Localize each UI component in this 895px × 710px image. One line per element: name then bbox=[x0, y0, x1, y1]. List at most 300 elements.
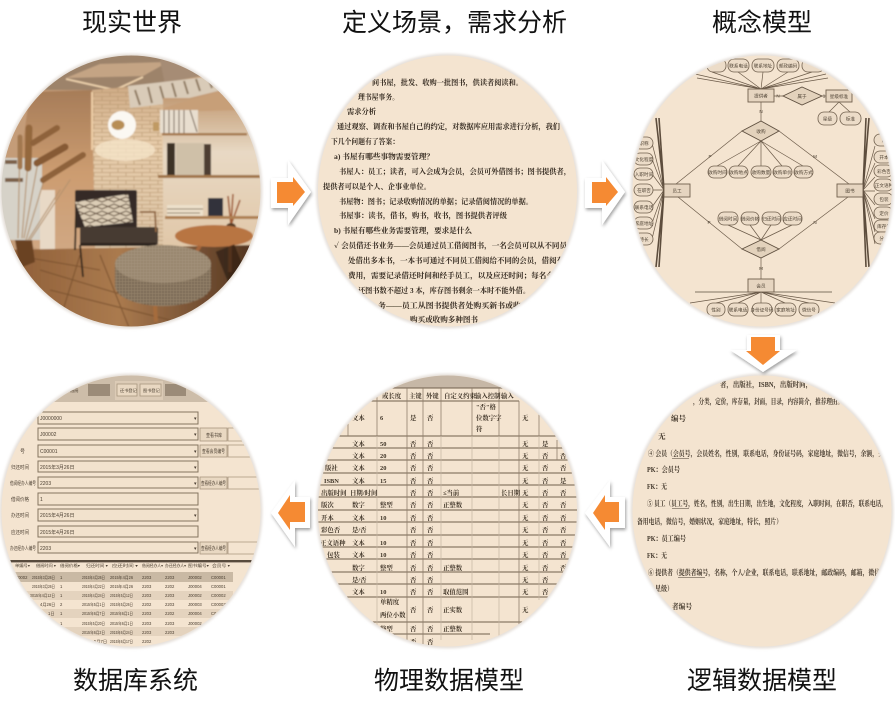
ER attribute ovals: 收购方式 bbox=[794, 169, 813, 176]
ER attribute ovals: 联系地址 bbox=[754, 62, 773, 70]
table rows: 否 bbox=[427, 605, 434, 614]
data grid: 2015年5月26日 bbox=[110, 601, 133, 608]
table rows: 无 bbox=[522, 550, 529, 559]
toolbar: 还书登记 bbox=[120, 387, 138, 394]
table header: 自定义约束 bbox=[444, 391, 477, 400]
ER attribute ovals: 性别 bbox=[711, 306, 721, 314]
panel: logical data model text circle: 备用电话，微信号，婚姻状况，家庭地址，特长，照片） bbox=[637, 516, 782, 527]
panel: requirement analysis text circle: 下几个问题有了答案： bbox=[331, 137, 399, 146]
title: 数据库系统: 数据库系统 bbox=[73, 667, 198, 695]
table rows: 是 bbox=[542, 439, 549, 448]
table rows: 正文语种 bbox=[320, 538, 346, 547]
table rows: 无 bbox=[522, 451, 529, 460]
ER attribute ovals: 联系电话 bbox=[635, 204, 654, 211]
ER attribute ovals: 在职否 bbox=[637, 187, 651, 194]
table rows: 否 bbox=[410, 538, 417, 547]
table rows: 数字 bbox=[352, 500, 365, 509]
form fields: 2203 bbox=[40, 546, 51, 552]
data grid: J00002 bbox=[188, 621, 202, 626]
table rows: 否 bbox=[427, 488, 434, 497]
ER attribute ovals: 微信号 bbox=[802, 306, 816, 314]
data grid: 2015年6月2日 bbox=[82, 629, 105, 636]
table rows: 无 bbox=[522, 500, 529, 509]
data grid: 图书编号▾ bbox=[188, 562, 209, 569]
panel: logical data model text circle: FK：无 bbox=[647, 481, 667, 491]
ER relationship lines bbox=[652, 72, 875, 303]
table rows: 否 bbox=[410, 463, 417, 472]
table rows: 两位小数 bbox=[380, 610, 406, 619]
data grid: C0 bbox=[211, 611, 217, 616]
table rows: 否 bbox=[560, 463, 567, 472]
ER attribute ovals: 借阅时间 bbox=[719, 216, 738, 222]
table rows bbox=[320, 402, 567, 646]
ER entities bbox=[664, 89, 863, 292]
form fields: 2203 bbox=[40, 481, 51, 487]
ER cardinality labels: 1 bbox=[823, 94, 826, 98]
table rows: 否 bbox=[542, 587, 549, 596]
table rows: 版次 bbox=[321, 500, 334, 509]
form labels: 办还经办人编号 bbox=[10, 545, 36, 552]
data grid: 4月26日 bbox=[40, 602, 55, 608]
form fields: J0000000 bbox=[40, 416, 62, 422]
toolbar: 图书登记 bbox=[143, 387, 161, 394]
table rows: 整型 bbox=[380, 500, 393, 509]
panel: requirement analysis text circle: a) 书屋有哪些事物需要管理？ bbox=[334, 152, 434, 161]
form labels: 号 bbox=[20, 449, 25, 455]
panel: requirement analysis text circle: 需求分析 bbox=[347, 107, 377, 116]
panel: requirement analysis text circle: 书屋人：员工；读者，可入会成为会员，会员可外借图书；图书提供者， bbox=[339, 167, 571, 177]
ER attribute ovals: 邮政编码 bbox=[779, 62, 798, 70]
data grid: J00002 bbox=[188, 575, 202, 580]
panel: requirement analysis text circle: 理书屋事务。 bbox=[358, 92, 399, 102]
table rows: 否 bbox=[542, 563, 549, 572]
panel: physical data model table circle bbox=[315, 372, 580, 650]
table rows: 文本 bbox=[352, 550, 365, 559]
data grid: 2015年3月26日 bbox=[32, 574, 55, 581]
table rows: 正整数 bbox=[443, 624, 463, 633]
data grid bbox=[10, 560, 255, 645]
ER attribute ovals: 星级 bbox=[823, 116, 832, 122]
data grid: 2015年4月22日 bbox=[82, 583, 105, 590]
data grid: 2202 bbox=[142, 639, 152, 644]
ER attribute ovals: 联系电话 bbox=[729, 306, 748, 314]
table rows: 否 bbox=[427, 513, 434, 522]
table rows: 10 bbox=[380, 589, 386, 596]
panel: logical data model text circle: PK：员工编号 bbox=[647, 533, 686, 543]
ER cardinality labels bbox=[707, 94, 826, 271]
table rows: 否 bbox=[542, 500, 549, 509]
data grid: 2203 bbox=[142, 575, 152, 580]
data grid: 2202 bbox=[142, 602, 152, 607]
table rows: 否 bbox=[427, 587, 434, 596]
form labels: 借阅价格 bbox=[11, 496, 29, 503]
table rows: 是/否 bbox=[352, 525, 367, 534]
title: 逻辑数据模型: 逻辑数据模型 bbox=[687, 667, 837, 695]
ER attribute ovals: 借阅价格 bbox=[741, 216, 760, 222]
title: 现实世界: 现实世界 bbox=[82, 9, 182, 37]
panel: requirement analysis text circle: 书屋物：图书；记录收购情况的单据；记录借阅情况的单据。 bbox=[339, 197, 533, 206]
table grid bbox=[318, 388, 590, 634]
panel: requirement analysis text circle: 还图书数不超过 3 本，库存图书剩余一本时不能外借。 bbox=[358, 286, 530, 296]
table rows: 否 bbox=[427, 500, 434, 509]
data grid: 借阅经办人▾ bbox=[142, 562, 163, 569]
data grid: 2015年6月1日 bbox=[110, 610, 133, 617]
table rows: 否 bbox=[427, 476, 434, 485]
panel: requirement analysis text circle: ✓ 会员借还书业务——会员通过员工借阅图书，一名会员可以从不同员 bbox=[334, 241, 569, 251]
ER cardinality labels: P bbox=[708, 154, 712, 159]
form fields: 2015年3月26日 bbox=[40, 464, 74, 471]
data grid: 借阅价格▾ bbox=[60, 562, 80, 569]
form fields: ▾ bbox=[194, 481, 197, 487]
table rows: 否 bbox=[542, 525, 549, 534]
table rows: 开本 bbox=[321, 513, 334, 522]
table rows: 否 bbox=[410, 488, 417, 497]
data grid: J0002 bbox=[16, 575, 28, 580]
ER attribute ovals: 家庭地址 bbox=[635, 220, 654, 227]
title: 定义场景，需求分析: 定义场景，需求分析 bbox=[342, 9, 567, 37]
ER attribute ovals: 正文语种 bbox=[875, 182, 894, 189]
table rows: 10 bbox=[380, 540, 386, 547]
panel: requirement analysis text circle: 书屋事：读书，借书，购书，收书，图书提供者评级 bbox=[339, 211, 508, 221]
data grid: 5月7日 bbox=[94, 639, 107, 645]
form fields: 1 bbox=[40, 497, 43, 503]
table rows: 否 bbox=[410, 624, 417, 633]
panel: requirement analysis text circle: 购买或收购多种图书 bbox=[410, 315, 479, 324]
table rows: 否 bbox=[427, 439, 434, 448]
ER attribute ovals: 文化程度 bbox=[635, 156, 654, 163]
table rows: 否 bbox=[410, 451, 417, 460]
table rows: 否 bbox=[427, 451, 434, 460]
data grid: 2015年6月7日 bbox=[82, 610, 105, 617]
ER attribute ovals: 入职时间 bbox=[635, 171, 654, 178]
table rows: 否 bbox=[560, 550, 567, 559]
table rows: 否 bbox=[410, 637, 417, 646]
ER attribute ovals: 包装 bbox=[879, 196, 889, 203]
table rows: 符 bbox=[476, 424, 483, 433]
ER attribute ovals: 应还时间 bbox=[783, 216, 802, 222]
table rows: 无 bbox=[522, 513, 529, 522]
data grid: 2 bbox=[60, 602, 63, 607]
ER attribute ovals: 职称 bbox=[639, 140, 649, 147]
form labels: 借阅经办人编号 bbox=[10, 480, 36, 487]
table header: 外键 bbox=[426, 391, 439, 400]
data grid: C00003 bbox=[211, 602, 226, 607]
panel: logical data model text circle bbox=[630, 374, 894, 648]
table rows: 文本 bbox=[352, 439, 365, 448]
ER attribute ovals: 归还时间 bbox=[762, 216, 781, 222]
table header: 或长度 bbox=[382, 391, 402, 400]
table rows: 否 bbox=[542, 513, 549, 522]
data grid: 归还时间 ▾ bbox=[86, 562, 108, 569]
table rows: 否 bbox=[542, 538, 549, 547]
form labels bbox=[10, 449, 36, 552]
data grid: 2203 bbox=[165, 575, 175, 580]
table rows: 否 bbox=[427, 413, 434, 422]
ER entities: 图书 bbox=[845, 188, 855, 194]
table header: 主键 bbox=[409, 391, 422, 400]
ER relationship diamonds: 借阅 bbox=[756, 246, 766, 253]
data grid: 会员号 ▾ bbox=[212, 562, 230, 569]
table rows: 否 bbox=[410, 439, 417, 448]
data grid: 1 bbox=[60, 593, 63, 598]
form fields bbox=[38, 412, 198, 553]
panel: requirement analysis text circle: 务——员工从图书提供者处购买新书或收 bbox=[378, 301, 522, 310]
ER attribute ovals: 库存量 bbox=[877, 223, 891, 230]
table rows: 无 bbox=[522, 525, 529, 534]
data grid: 1 bbox=[60, 575, 63, 580]
data grid: 单编号▾ bbox=[15, 562, 30, 569]
table rows: 否 bbox=[410, 513, 417, 522]
data grid: 2203 bbox=[142, 630, 152, 635]
table columns bbox=[348, 388, 557, 650]
table rows: ≤当前 bbox=[443, 488, 460, 497]
form fields: ▾ bbox=[194, 449, 197, 455]
table rows: 否 bbox=[410, 575, 417, 584]
form labels: 应还时间 bbox=[11, 529, 29, 536]
table header: 输入控制 bbox=[475, 391, 501, 400]
table rows: 否 bbox=[427, 624, 434, 633]
table rows: 否 bbox=[560, 500, 567, 509]
panel: logical data model text circle: 者编号 bbox=[672, 601, 692, 611]
ER attribute ovals: 标准 bbox=[846, 116, 855, 122]
panel: database system form circle bbox=[0, 370, 264, 648]
form labels: 归还时间 bbox=[11, 464, 29, 471]
ER attribute ovals: 定价 bbox=[879, 210, 889, 217]
panel: logical data model text circle: ，分类，定价，库存量，封面，目录，内容简介，推荐理由。 bbox=[693, 396, 843, 407]
ER entities: 员工 bbox=[672, 188, 682, 194]
data grid: 1日 bbox=[48, 611, 55, 617]
panel: requirement analysis text circle: 提供者可以是个人、企事业单位。 bbox=[323, 182, 431, 191]
data grid: 应还时间 ▾ bbox=[112, 562, 138, 569]
table rows: 否 bbox=[410, 587, 417, 596]
data grid: 2203 bbox=[142, 611, 152, 616]
ER attribute ovals: 收购数量 bbox=[752, 169, 771, 176]
ER relationship diamonds bbox=[742, 87, 822, 258]
form side buttons: 查看书库 bbox=[206, 432, 222, 439]
form fields: ▾ bbox=[194, 416, 197, 422]
table rows: 否 bbox=[427, 563, 434, 572]
title: 概念模型: 概念模型 bbox=[712, 9, 812, 37]
table rows: 否 bbox=[542, 463, 549, 472]
data grid: 1 bbox=[60, 584, 63, 589]
panel: logical data model text circle: 编号 bbox=[671, 413, 686, 423]
form fields: ▾ bbox=[194, 465, 197, 471]
panel: logical data model text circle: PK：会员号 bbox=[647, 464, 680, 474]
arrow: requirements to concept model bbox=[585, 160, 625, 225]
data grid: 2203 bbox=[165, 593, 175, 598]
ER attribute ovals: 家庭地址 bbox=[776, 306, 795, 314]
panel: requirement analysis text circle bbox=[316, 54, 579, 328]
data grid: J00003 bbox=[188, 602, 202, 607]
table rows: 10 bbox=[380, 515, 386, 522]
data grid: C00002 bbox=[211, 593, 226, 598]
form labels: 办还时间 bbox=[11, 512, 29, 519]
table rows: 否 bbox=[410, 525, 417, 534]
panel: logical data model text circle: 无 bbox=[658, 431, 666, 441]
data grid: 2203 bbox=[142, 584, 152, 589]
ER attribute ovals: 联系电话 bbox=[729, 62, 748, 70]
form fields: ▾ bbox=[194, 513, 197, 519]
ER entities: 提供者 bbox=[754, 92, 768, 100]
table rows: 20 bbox=[380, 465, 386, 472]
table rows: 否 bbox=[542, 550, 549, 559]
table rows: 否 bbox=[427, 463, 434, 472]
data grid: 2015年6月1日 bbox=[110, 620, 133, 627]
table rows: 位数字字 bbox=[476, 413, 502, 422]
table rows: 数字 bbox=[352, 563, 365, 572]
data grid: 2015年4月26 bbox=[110, 583, 134, 590]
table rows: 包装 bbox=[327, 550, 340, 559]
panel: logical data model text circle: FK：无 bbox=[647, 550, 667, 560]
panel: requirement analysis text circle: 费用，需要记录借还时间和经手员工，以及应还时间；每名会 bbox=[348, 271, 555, 281]
table rows: 无 bbox=[522, 476, 529, 485]
table rows: 否 bbox=[427, 550, 434, 559]
data grid: 2015年4月24日 bbox=[82, 592, 105, 599]
data grid: 2015年4月12日 bbox=[30, 592, 55, 599]
table rows: 文本 bbox=[352, 476, 365, 485]
data grid: 2203 bbox=[142, 593, 152, 598]
ER entities: 会员 bbox=[756, 282, 766, 290]
panel: ER concept model circle bbox=[630, 54, 894, 328]
table rows: 否 bbox=[542, 476, 549, 485]
table rows: 文本 bbox=[352, 538, 365, 547]
table rows: 否 bbox=[427, 525, 434, 534]
table rows: 否 bbox=[410, 563, 417, 572]
table rows: 否 bbox=[410, 605, 417, 614]
data grid: J00004 bbox=[188, 611, 202, 616]
table rows: 否 bbox=[427, 637, 434, 646]
form fields: 2015年4月26日 bbox=[40, 529, 74, 536]
ER cardinality labels: N bbox=[759, 109, 763, 114]
table rows: 正整数 bbox=[443, 500, 463, 509]
ER attribute ovals: 收购时间 bbox=[708, 169, 727, 176]
table rows: 否 bbox=[410, 500, 417, 509]
form fields: ▾ bbox=[194, 432, 197, 438]
data grid: 办还经办人▾ bbox=[165, 562, 186, 569]
ER cardinality labels: P bbox=[707, 220, 711, 225]
table rows: 无 bbox=[522, 538, 529, 547]
table rows: 否 bbox=[560, 488, 567, 497]
form fields: ▾ bbox=[194, 546, 197, 552]
ER cardinality labels: N bbox=[813, 220, 817, 225]
data grid: 2202 bbox=[165, 584, 175, 589]
toolbar: 借阅 bbox=[70, 387, 78, 394]
arrow: logical to physical model bbox=[585, 480, 625, 547]
table rows: 无 bbox=[522, 413, 529, 422]
table rows: 否 bbox=[427, 538, 434, 547]
table rows: 50 bbox=[380, 441, 386, 448]
ER attribute ovals: 版 bbox=[882, 137, 887, 144]
table rows: 否 bbox=[560, 563, 567, 572]
data grid: 2015年4月26日 bbox=[82, 574, 105, 581]
data grid: 2015年5月12日 bbox=[110, 592, 133, 599]
data grid: 2203 bbox=[165, 630, 175, 635]
ER attribute ovals: 收购单价 bbox=[773, 169, 792, 176]
ER attribute ovals: 彩色否 bbox=[877, 168, 891, 175]
table rows: 无 bbox=[522, 587, 529, 596]
table rows: 单精度 bbox=[380, 597, 400, 606]
data grid: 2203 bbox=[165, 602, 175, 607]
data grid: 2015年6月24日 bbox=[110, 629, 133, 636]
data grid: 2202 bbox=[165, 611, 175, 616]
table rows: 无 bbox=[522, 563, 529, 572]
ER cardinality labels: N bbox=[776, 94, 780, 98]
form side buttons: 查看会员编号 bbox=[202, 448, 225, 455]
table rows: 20 bbox=[380, 453, 386, 460]
form side buttons: 查看经办人编号 bbox=[201, 480, 226, 487]
table rows: 否 bbox=[560, 538, 567, 547]
table rows: 否 bbox=[542, 451, 549, 460]
table rows: 无 bbox=[522, 605, 529, 614]
form fields: 2015年4月26日 bbox=[40, 512, 74, 519]
form side buttons bbox=[200, 428, 262, 554]
table rows: 日期/时间 bbox=[350, 488, 378, 497]
ER entities: 星级标准 bbox=[830, 93, 849, 100]
table rows: 整型 bbox=[380, 563, 393, 572]
panel: requirement analysis text circle: 间书屋，批发、收购一批图书，供读者阅读和。 bbox=[372, 78, 523, 88]
data grid: 2203 bbox=[142, 621, 152, 626]
table rows: 正整数 bbox=[443, 563, 463, 572]
ER attribute ovals: 开本 bbox=[879, 154, 889, 161]
data grid: C00001 bbox=[211, 584, 226, 589]
table rows: 否 bbox=[427, 575, 434, 584]
ER attribute ovals: 特长 bbox=[639, 236, 649, 243]
table rows: 否 bbox=[560, 451, 567, 460]
table rows: 文本 bbox=[352, 413, 365, 422]
table rows: 无 bbox=[522, 463, 529, 472]
form fields: C00001 bbox=[40, 449, 58, 455]
arrow: physical model to database system bbox=[271, 480, 310, 547]
table rows: 无 bbox=[522, 439, 529, 448]
ER cardinality labels: M bbox=[759, 266, 763, 271]
ER attribute ovals: 收购地点 bbox=[729, 169, 748, 176]
data grid: 2015年5月1日 bbox=[82, 601, 105, 608]
table header bbox=[382, 392, 514, 400]
data grid: J00004 bbox=[188, 584, 202, 589]
data grid: 2015年3月26日 bbox=[32, 583, 55, 590]
toolbar bbox=[54, 376, 208, 402]
table rows: 文本 bbox=[352, 513, 365, 522]
table rows: 否 bbox=[560, 513, 567, 522]
table rows: 否 bbox=[410, 476, 417, 485]
table rows: 无 bbox=[522, 488, 529, 497]
panel: real world photo circle bbox=[0, 50, 264, 330]
table rows: 15 bbox=[380, 478, 386, 485]
table rows: 否 bbox=[560, 525, 567, 534]
data grid: J00002 bbox=[188, 593, 202, 598]
table rows: 正实数 bbox=[443, 605, 463, 614]
panel: logical data model text circle: 者，出版社，ISBN，出版时间， bbox=[720, 379, 812, 390]
panel: requirement analysis text circle: b) 书屋有哪些业务需要管理，要求是什么 bbox=[334, 226, 473, 236]
table rows: 取值范围 bbox=[443, 587, 469, 596]
table rows: 否 bbox=[542, 575, 549, 584]
panel: requirement analysis text circle: 处借出多本书，一本书可通过不同员工借阅给不同的会员，借阅有 bbox=[348, 256, 565, 266]
data grid: 1 bbox=[60, 621, 63, 626]
data grid: C00001 bbox=[211, 575, 226, 580]
table rows: "否"格 bbox=[476, 402, 496, 411]
table rows: 版社 bbox=[325, 463, 338, 472]
table rows: 整型 bbox=[380, 624, 393, 633]
ER attribute ovals: 身份证号码 bbox=[751, 306, 774, 314]
data grid: 2015年5月20日 bbox=[82, 620, 105, 627]
table rows: 文本 bbox=[352, 587, 365, 596]
panel: requirement analysis text circle: 通过观察、调查和书屋自己的约定，对数据库应用需求进行分析，我们 bbox=[337, 122, 561, 132]
ER cardinality labels: M bbox=[813, 154, 817, 159]
table rows: 是 bbox=[410, 413, 417, 422]
ER relationship diamonds: 属于 bbox=[797, 94, 807, 100]
data grid: 2203 bbox=[165, 621, 175, 626]
form side buttons: 查看经办人编号 bbox=[201, 545, 226, 552]
